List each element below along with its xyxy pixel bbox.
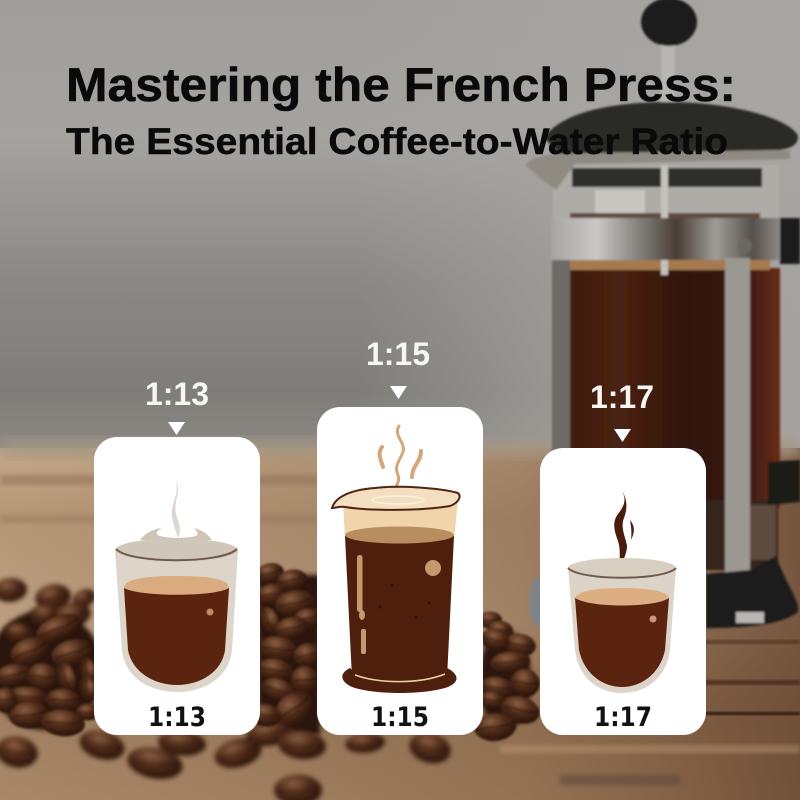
brew xyxy=(552,268,780,508)
glass body xyxy=(553,165,779,225)
card xyxy=(94,437,260,735)
steel band xyxy=(551,218,780,260)
glass xyxy=(343,500,458,540)
card xyxy=(540,448,706,735)
title line 2: The Essential Coffee-to-Water Ratio xyxy=(66,121,728,162)
rim xyxy=(332,487,460,510)
coffee xyxy=(575,598,669,687)
specks xyxy=(378,584,430,618)
pointer arrow xyxy=(390,386,407,399)
handle xyxy=(780,218,800,264)
ratio label: 1:13 xyxy=(145,376,209,412)
panel: 1:15 ratio xyxy=(317,336,483,735)
panel: 1:17 ratio xyxy=(540,379,706,735)
background: wooden table xyxy=(0,440,800,800)
highlights xyxy=(425,560,441,576)
glass rim xyxy=(116,538,238,562)
lid rim xyxy=(525,150,790,190)
title xyxy=(66,58,736,162)
coffee beans xyxy=(0,561,543,800)
title line 1: Mastering the French Press: xyxy=(66,58,736,111)
French press xyxy=(525,0,800,628)
steam xyxy=(614,491,627,568)
panel: 1:13 ratio xyxy=(94,376,260,735)
plunger rod xyxy=(661,44,675,104)
base xyxy=(706,556,798,628)
card label: 1:13 xyxy=(148,702,206,733)
foam xyxy=(140,528,212,540)
coffee xyxy=(124,588,229,685)
knob xyxy=(641,0,697,46)
glass xyxy=(568,568,676,693)
coffee xyxy=(345,536,454,678)
steam xyxy=(380,426,421,487)
pointer arrow xyxy=(168,422,185,435)
highlight dot xyxy=(206,608,214,616)
saucer xyxy=(342,668,457,693)
pointer arrow xyxy=(614,429,631,442)
lower press body xyxy=(552,500,778,570)
ratio label: 1:15 xyxy=(366,336,430,372)
card label: 1:17 xyxy=(594,702,652,733)
steam xyxy=(172,481,180,538)
card label: 1:15 xyxy=(371,702,429,733)
lid xyxy=(544,102,798,154)
coffee surface xyxy=(124,576,229,595)
highlight dot xyxy=(650,616,656,622)
foam ring xyxy=(372,496,424,504)
glass xyxy=(115,550,238,692)
background: grey wall xyxy=(0,0,800,460)
card xyxy=(317,407,483,735)
dark cluster shadows xyxy=(0,575,531,735)
coffee surface xyxy=(345,526,454,544)
glass rim xyxy=(568,558,676,578)
base shadow foot xyxy=(529,578,547,626)
frame strips xyxy=(725,258,750,580)
coffee surface xyxy=(575,588,669,606)
ratio label: 1:17 xyxy=(590,379,654,415)
